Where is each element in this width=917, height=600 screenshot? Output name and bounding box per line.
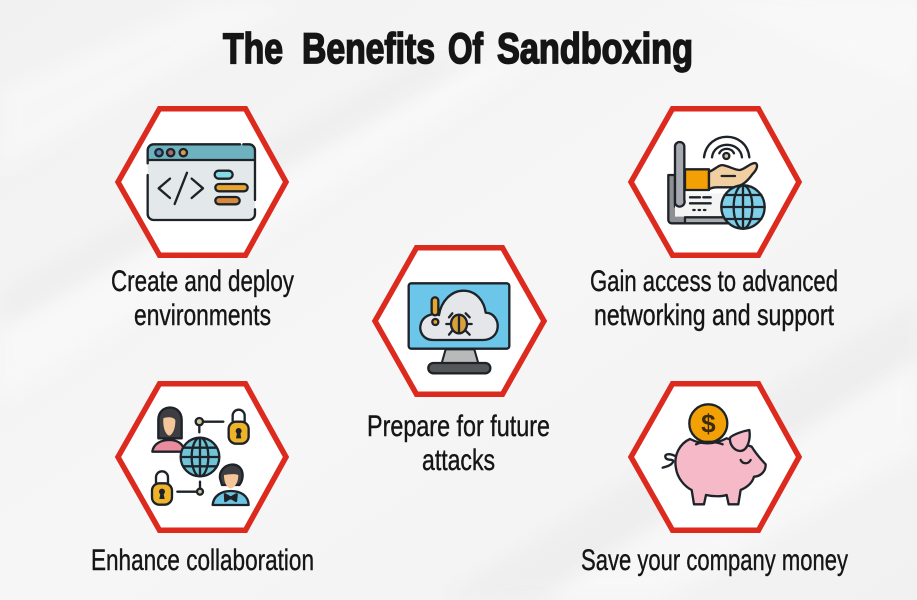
hexagon frame: save money [631,384,799,530]
icon: hand with wifi and globe [668,137,765,229]
hexagon frame: prepare [375,248,544,394]
label: create and deploy environments: environments [134,299,271,332]
title: The [223,25,283,73]
panel: enhance collaboration [91,384,314,577]
label: enhance collaboration: Enhance collaboration [91,544,314,577]
panel: save your company money [581,384,848,577]
title: Sandboxing [497,25,693,73]
icon: piggy bank with coin [663,404,766,504]
title: Of [448,25,483,73]
panel: create and deploy environments [111,109,294,332]
hexagon frame: networking [631,109,799,255]
label: gain access to advanced networking and support: networking and support [594,299,835,332]
panel: advanced networking and support [590,109,838,332]
hexagon frame: collaboration [118,384,286,530]
label: create and deploy environments: Create and deploy [111,265,294,298]
icon: people, globe and locks [152,407,249,505]
icon: monitor with cloud bug [409,283,509,373]
hexagon frame: create [118,109,286,255]
title: Benefits [302,25,435,73]
panel: prepare for future attacks [367,248,550,477]
label: prepare for future attacks: attacks [422,444,495,477]
label: prepare for future attacks: Prepare for future [367,410,550,443]
icon: code window [148,144,255,220]
icon: piggy bank with coin: $ [701,408,716,438]
label: gain access to advanced networking and support: Gain access to advanced [590,265,838,298]
